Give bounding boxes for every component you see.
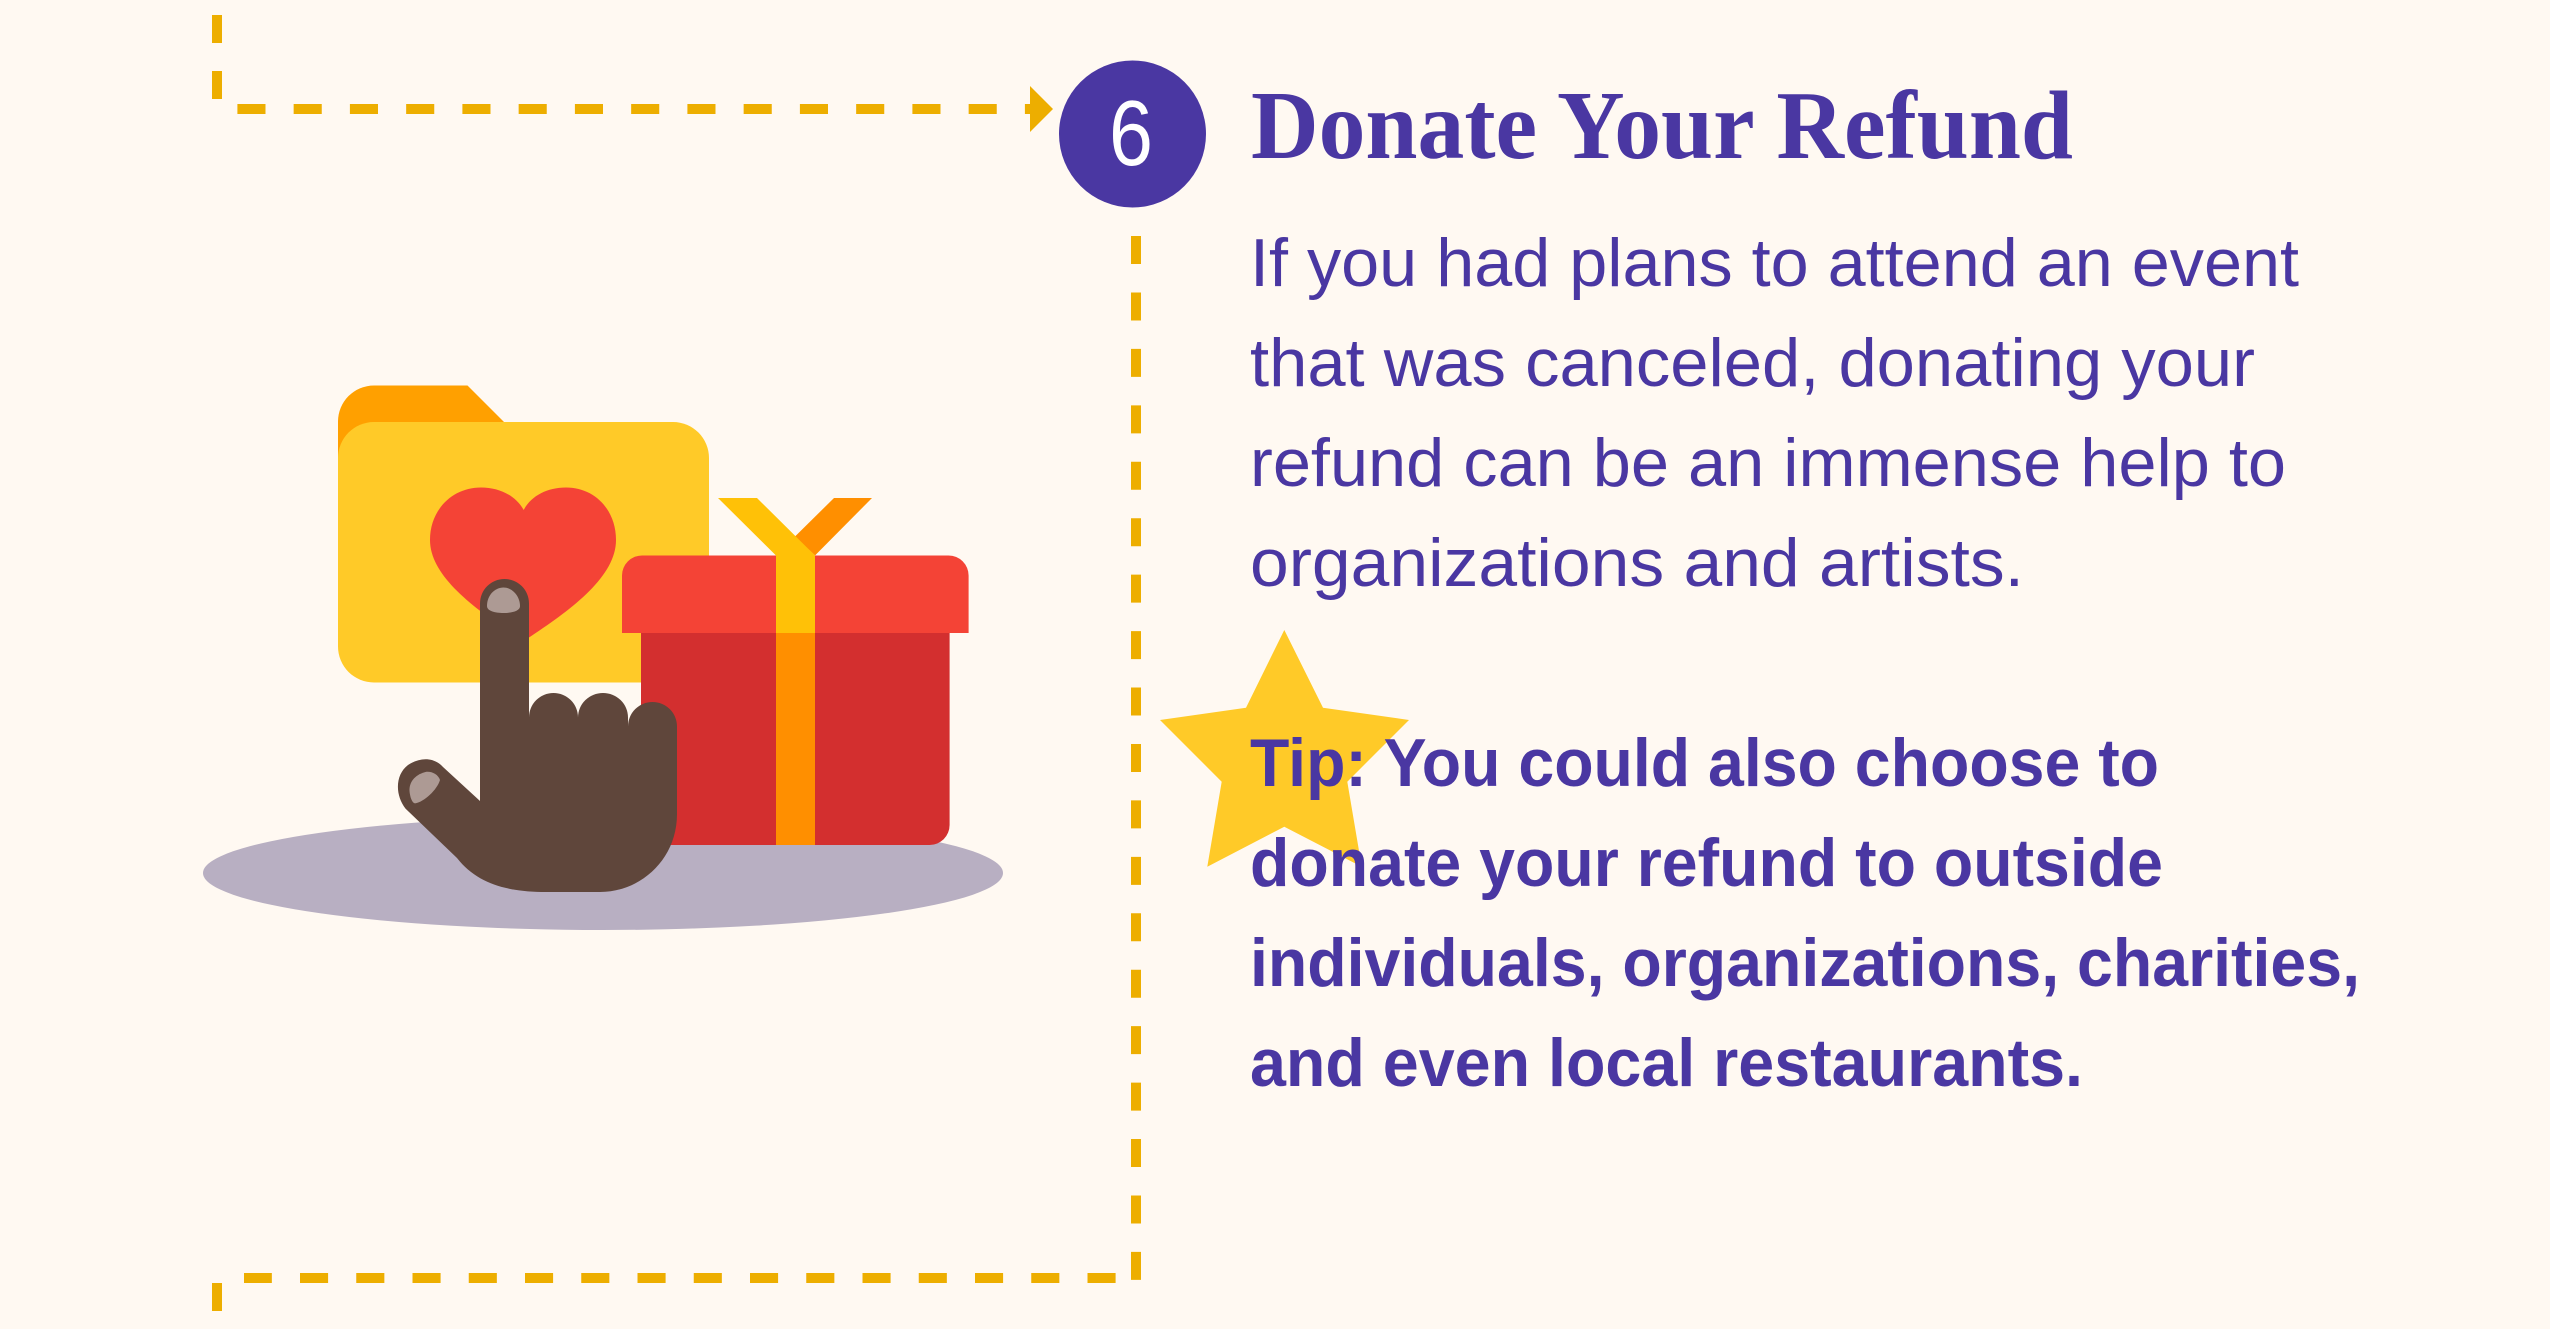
illustration: hand, folder and gift xyxy=(203,386,1003,930)
dashed connector: outgoing line xyxy=(217,236,1136,1311)
body text: that was canceled, donating your xyxy=(1250,325,2255,401)
ground shadow xyxy=(203,816,1003,930)
step number badge xyxy=(1059,60,1206,208)
icon: tip star xyxy=(1160,630,1409,867)
body text: organizations and artists. xyxy=(1250,525,2024,601)
dashed connector: incoming arrow xyxy=(217,15,1053,132)
icon: gift box xyxy=(622,498,969,845)
tip text: individuals, organizations, charities, xyxy=(1250,925,2360,1001)
tip text: donate your refund to outside xyxy=(1250,825,2163,901)
step number badge: 6 xyxy=(1109,81,1153,185)
heading: Donate Your Refund xyxy=(1251,72,2073,179)
body text: refund can be an immense help to xyxy=(1250,425,2286,501)
icon: pointing hand xyxy=(398,579,677,892)
tip text: Tip: You could also choose to xyxy=(1250,725,2159,801)
icon: folder with heart xyxy=(338,386,709,682)
body text: If you had plans to attend an event xyxy=(1250,225,2299,301)
tip text: and even local restaurants. xyxy=(1250,1025,2083,1101)
